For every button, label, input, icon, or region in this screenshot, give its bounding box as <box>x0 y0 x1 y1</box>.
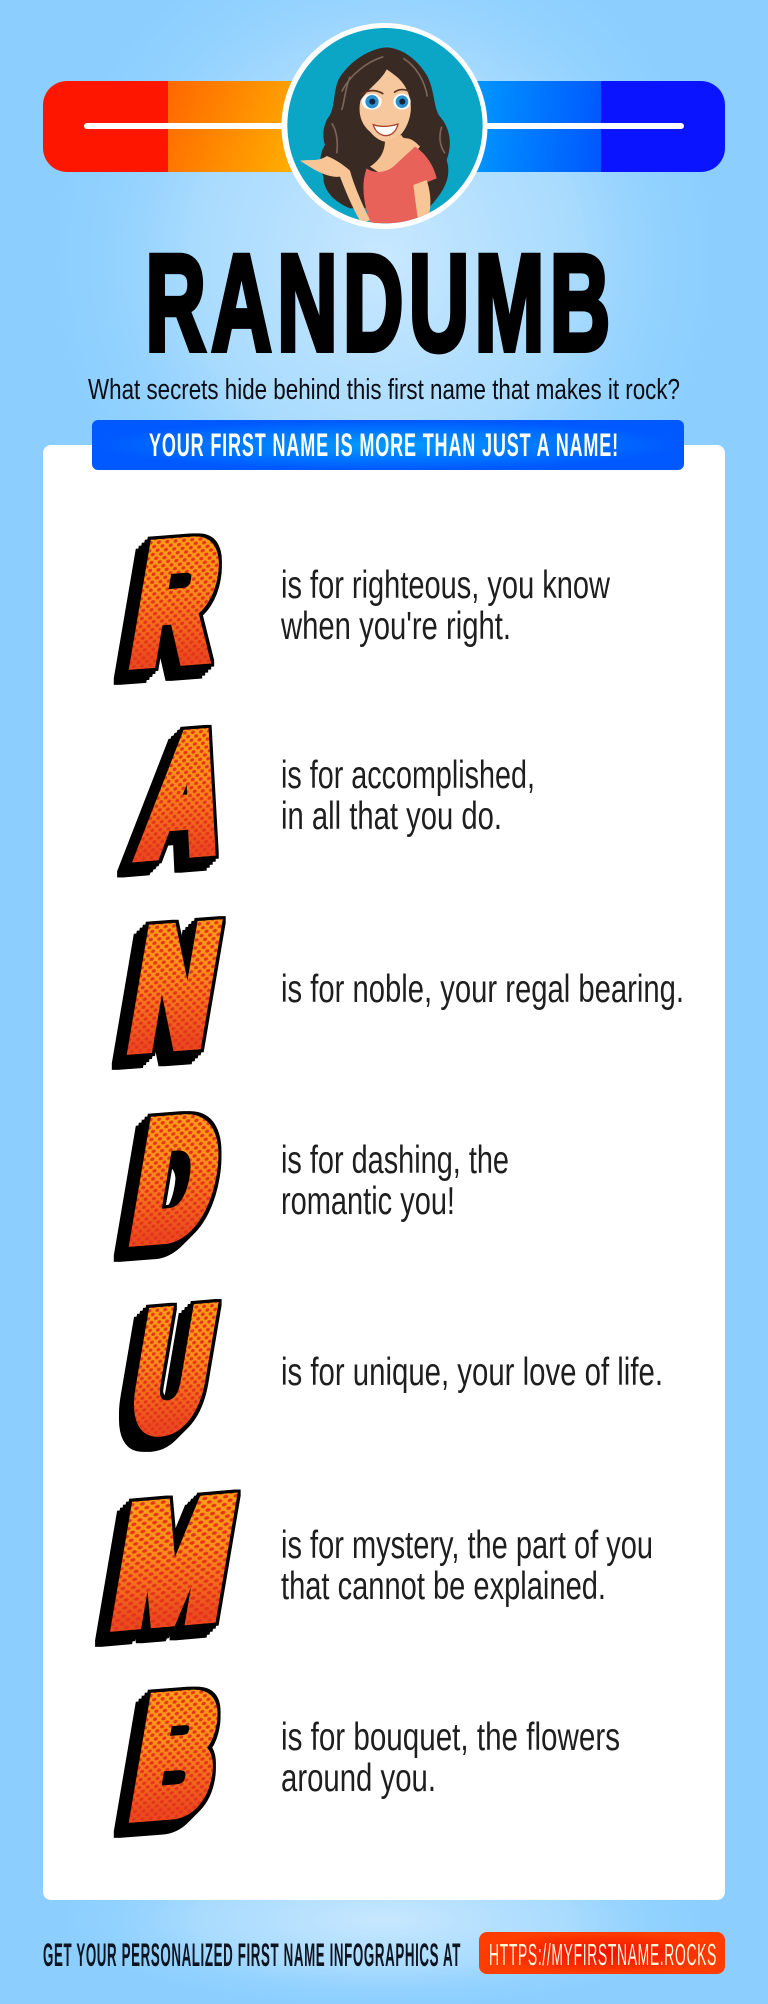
title: RANDUMB <box>146 227 616 380</box>
letter A: A <box>133 701 237 889</box>
footer url button <box>479 1932 725 1974</box>
text: M: that cannot be explained. <box>281 1565 606 1608</box>
avatar hair <box>320 47 450 208</box>
letter M: M <box>104 1466 244 1658</box>
text: A: in all that you do. <box>281 795 502 838</box>
banner <box>92 420 684 470</box>
avatar shirt <box>363 147 437 223</box>
header colour bar <box>43 81 725 172</box>
text: B: is for bouquet, the flowers <box>281 1716 620 1759</box>
text: B: around you. <box>281 1757 436 1800</box>
text: D: romantic you! <box>281 1180 455 1223</box>
avatar smile <box>373 124 398 136</box>
text: R: when you're right. <box>280 605 511 648</box>
avatar arm and hand <box>300 156 370 223</box>
avatar face <box>360 69 411 142</box>
text: M <box>281 1524 653 1608</box>
text: M: is for mystery, the part of you <box>281 1524 653 1567</box>
avatar portrait <box>282 23 488 229</box>
avatar eyes <box>361 90 411 110</box>
white content panel <box>43 445 725 1900</box>
text: D: is for dashing, the <box>281 1139 509 1182</box>
text: D <box>281 1139 509 1223</box>
text: B <box>281 1716 620 1800</box>
text: R: is for righteous, you know <box>281 564 611 607</box>
text: R <box>280 564 611 648</box>
avatar other arm <box>413 180 430 218</box>
letter U: U <box>122 1276 224 1464</box>
letter N: N <box>121 894 228 1081</box>
letter R: R <box>123 509 229 696</box>
letter B: B <box>123 1662 230 1849</box>
avatar hair highlights <box>332 57 445 153</box>
text: A <box>281 754 535 838</box>
text: A: is for accomplished, <box>281 754 535 797</box>
letter D: D <box>123 1086 230 1273</box>
avatar neck and chest <box>370 135 420 173</box>
